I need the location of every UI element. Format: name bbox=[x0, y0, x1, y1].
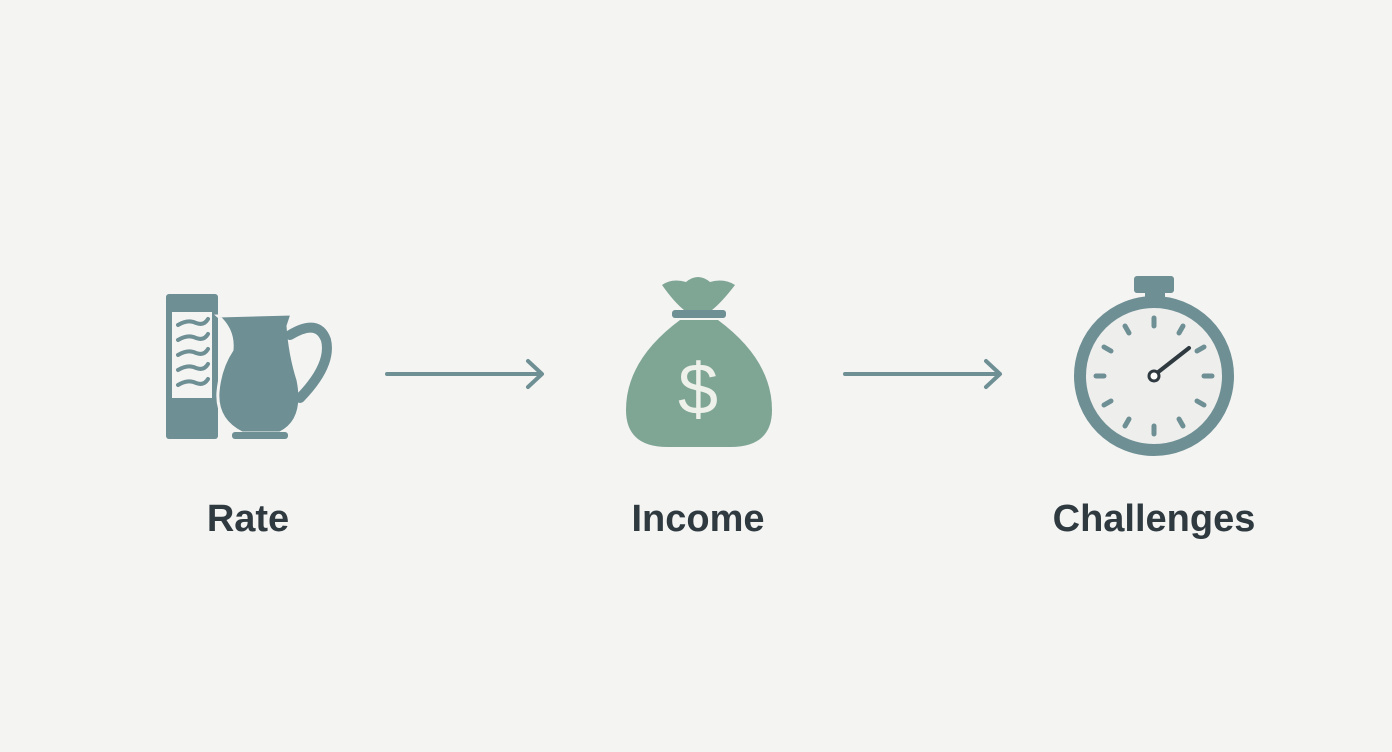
arrow 1 bbox=[387, 361, 542, 387]
label: Challenges: Challenges bbox=[1053, 498, 1255, 540]
arrow 2 bbox=[845, 361, 1000, 387]
icon: stopwatch bbox=[1080, 276, 1228, 450]
label: Income: Income bbox=[631, 498, 765, 540]
icon: rate (tube and pitcher) bbox=[166, 294, 327, 439]
icon: money bag bbox=[626, 277, 772, 447]
label: Rate: Rate bbox=[207, 498, 289, 540]
icon: money bag: $ bbox=[678, 350, 718, 430]
